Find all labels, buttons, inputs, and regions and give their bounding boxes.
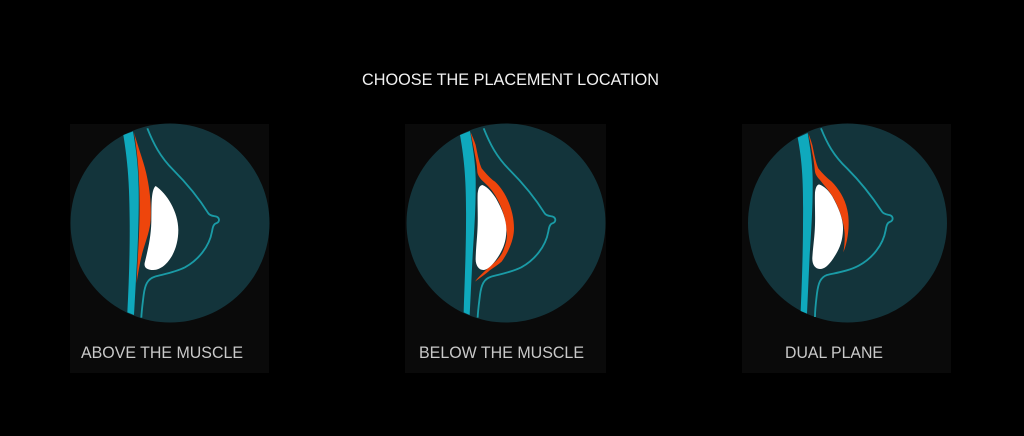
label: below the muscle: BELOW THE MUSCLE [419,344,584,362]
panel: below the muscle [405,124,606,373]
diagram: dual plane placement [798,128,893,317]
panel: above the muscle [70,124,270,373]
title: CHOOSE THE PLACEMENT LOCATION [362,70,659,89]
label: dual plane: DUAL PLANE [785,344,883,362]
diagram: above the muscle placement [123,128,219,318]
diagram: below the muscle placement [460,128,555,318]
panel: dual plane [742,124,951,373]
label: above the muscle: ABOVE THE MUSCLE [81,344,243,362]
